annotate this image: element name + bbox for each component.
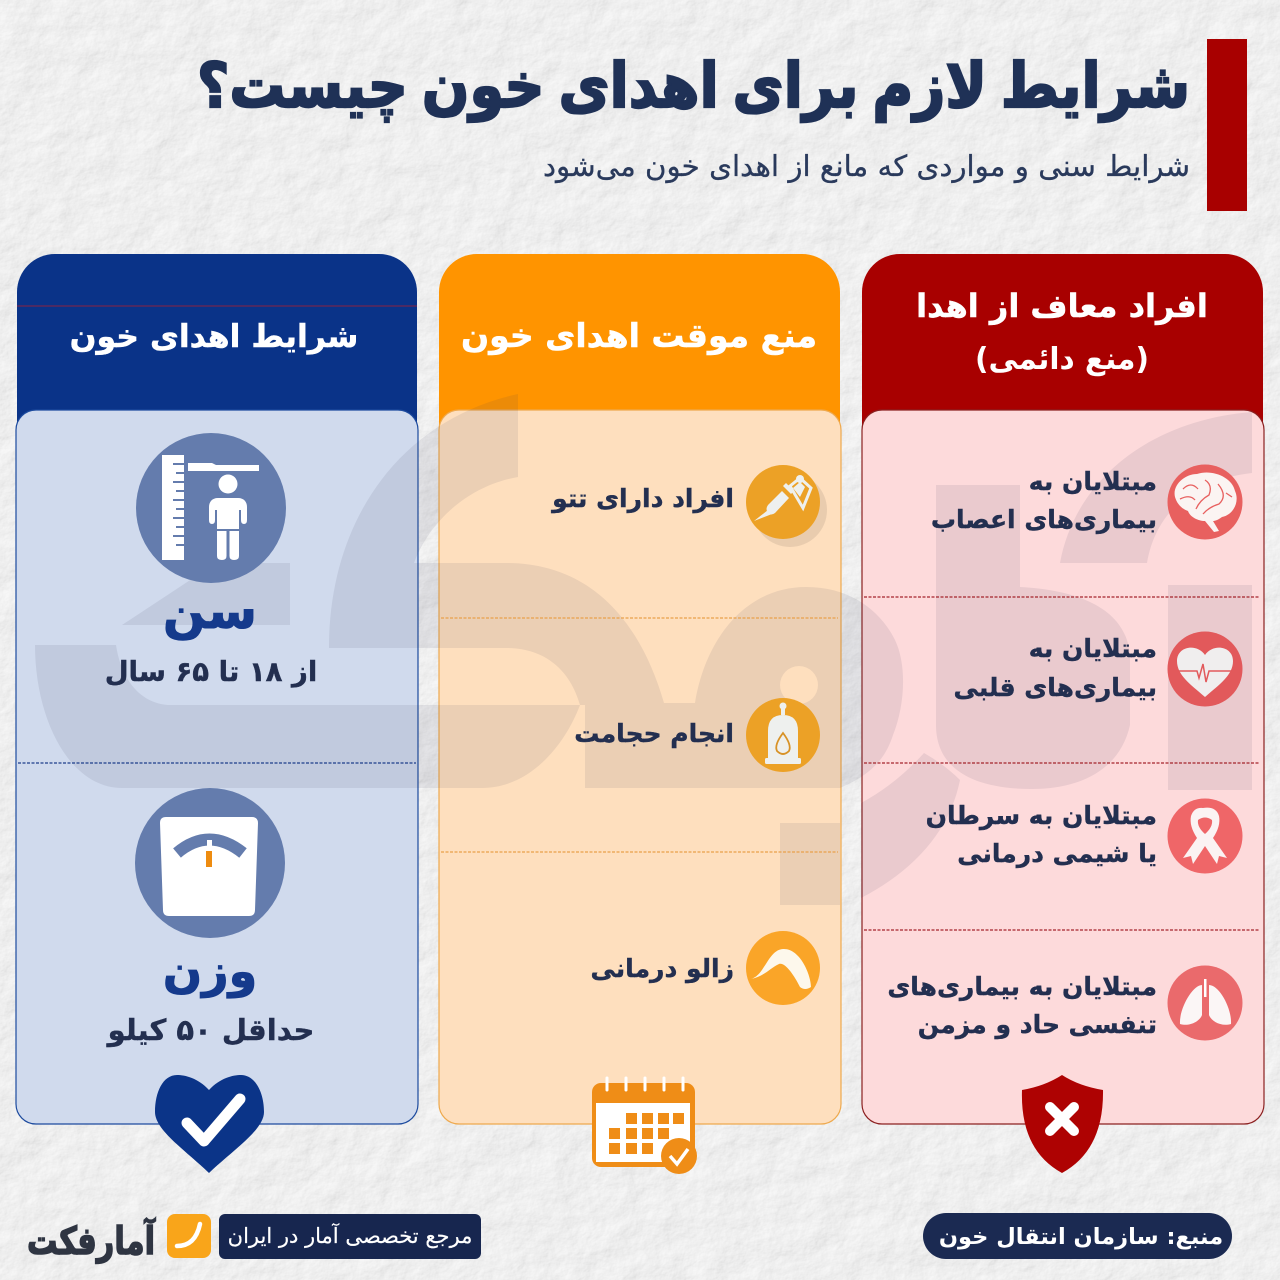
item: cancer: مبتلایان به سرطان — [926, 801, 1157, 831]
subtitle: شرایط سنی و مواردی که مانع از اهدای خون می‌شود — [543, 149, 1190, 183]
item: neurological disease: مبتلایان به — [1029, 467, 1157, 496]
logo wordmark: آمارفکت — [27, 1217, 156, 1263]
icon: calendar — [592, 1078, 697, 1174]
item: neurological disease — [931, 464, 1242, 540]
source pill: منبع: سازمان انتقال خون — [939, 1224, 1223, 1250]
item: respiratory disease — [887, 966, 1242, 1040]
icon: shield with cross — [1022, 1075, 1103, 1173]
icon: weighing scale — [135, 788, 285, 938]
item: neurological disease: بیماری‌های اعصاب — [931, 505, 1157, 534]
logo icon — [167, 1214, 211, 1258]
item: cupping — [574, 698, 820, 772]
item: cancer: یا شیمی درمانی — [957, 839, 1157, 868]
text: minimum weight: حداقل ۵۰ کیلو — [106, 1013, 314, 1047]
item: respiratory disease: تنفسی حاد و مزمن — [918, 1010, 1157, 1040]
item: cupping: انجام حجامت — [574, 719, 734, 748]
tagline box — [219, 1214, 481, 1259]
item: heart disease: مبتلایان به — [1029, 634, 1157, 663]
panel heading: donation conditions: شرایط اهدای خون — [70, 319, 358, 355]
panel heading: exempt donors: افراد معاف از اهدا — [916, 287, 1208, 325]
source pill — [923, 1213, 1232, 1259]
panel heading: temporary ban: منع موقت اهدای خون — [461, 316, 817, 356]
panel subheading: permanent ban: (منع دائمی) — [975, 342, 1149, 377]
icon: height measuring — [136, 433, 286, 583]
text: age range: از ۱۸ تا ۶۵ سال — [105, 656, 317, 688]
tagline box: مرجع تخصصی آمار در ایران — [228, 1223, 472, 1248]
item: cancer — [926, 798, 1242, 874]
icon: heart with check — [155, 1075, 264, 1173]
panel: permanent ban (red) — [861, 254, 1265, 1173]
item: leech therapy: زالو درمانی — [590, 954, 734, 984]
panel: temporary ban (orange) — [438, 254, 842, 1174]
item: leech therapy — [590, 931, 820, 1005]
panel: donation conditions (blue) — [15, 254, 419, 1173]
red accent bar — [1207, 39, 1247, 211]
title: شرایط لازم برای اهدای خون چیست؟ — [197, 49, 1190, 123]
item: heart disease: بیماری‌های قلبی — [954, 673, 1157, 702]
label: age: سن — [163, 582, 257, 641]
item: tattoo: افراد دارای تتو — [550, 484, 734, 514]
label: weight: وزن — [163, 944, 257, 998]
item: respiratory disease: مبتلایان به بیماری‌های — [887, 972, 1157, 1001]
item: heart disease — [954, 632, 1242, 706]
item: tattoo — [550, 465, 827, 547]
